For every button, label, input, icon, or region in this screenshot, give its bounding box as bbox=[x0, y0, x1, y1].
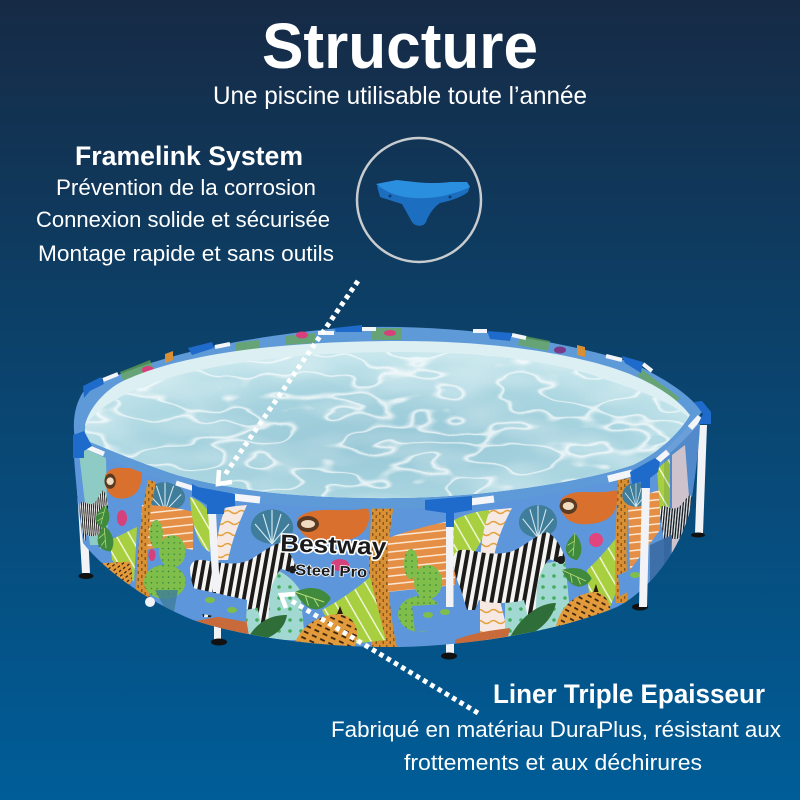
description line 1: Fabriqué en matériau DuraPlus, résistant aux bbox=[331, 717, 781, 742]
water bbox=[85, 352, 688, 498]
description line 2: frottements et aux déchirures bbox=[404, 750, 702, 775]
benefit: connection: Connexion solide et sécurisée bbox=[36, 207, 330, 232]
right section print bbox=[453, 445, 696, 650]
arrow: Framelink pointer bbox=[218, 281, 358, 484]
logo: Bestway Steel Pro bbox=[280, 530, 387, 581]
heading: Liner Triple Epaisseur: Liner Triple Epaisseur bbox=[493, 679, 765, 709]
pool bbox=[60, 325, 720, 660]
pool legs and feet bbox=[75, 425, 707, 660]
logo: Bestway Steel Pro: Bestway bbox=[280, 530, 387, 561]
water caustics bbox=[85, 352, 684, 498]
logo: Bestway Steel Pro: Steel Pro bbox=[295, 562, 367, 581]
liner wall shading bbox=[664, 424, 700, 564]
benefit: assembly: Montage rapide et sans outils bbox=[38, 241, 334, 266]
front legs bbox=[208, 485, 650, 607]
top rail bbox=[85, 329, 701, 505]
liner straps bbox=[145, 562, 648, 632]
benefit: corrosion: Prévention de la corrosion bbox=[56, 175, 316, 200]
liner wall print bbox=[74, 424, 700, 647]
arrow: liner pointer bbox=[281, 594, 478, 713]
frame joints bbox=[73, 325, 711, 527]
center section print bbox=[155, 497, 455, 650]
subtitle: Une piscine utilisable toute l’année bbox=[213, 82, 587, 110]
icon: framelink joint in circle bbox=[357, 138, 481, 262]
text block: Liner Triple Epaisseur bbox=[331, 679, 781, 775]
heading: Framelink System: Framelink System bbox=[75, 141, 303, 171]
inner pool wall bbox=[85, 341, 690, 498]
title: Structure bbox=[262, 10, 538, 82]
left section print bbox=[78, 445, 193, 600]
rim band with liner print bbox=[74, 327, 702, 505]
text block: Framelink System bbox=[36, 141, 334, 266]
